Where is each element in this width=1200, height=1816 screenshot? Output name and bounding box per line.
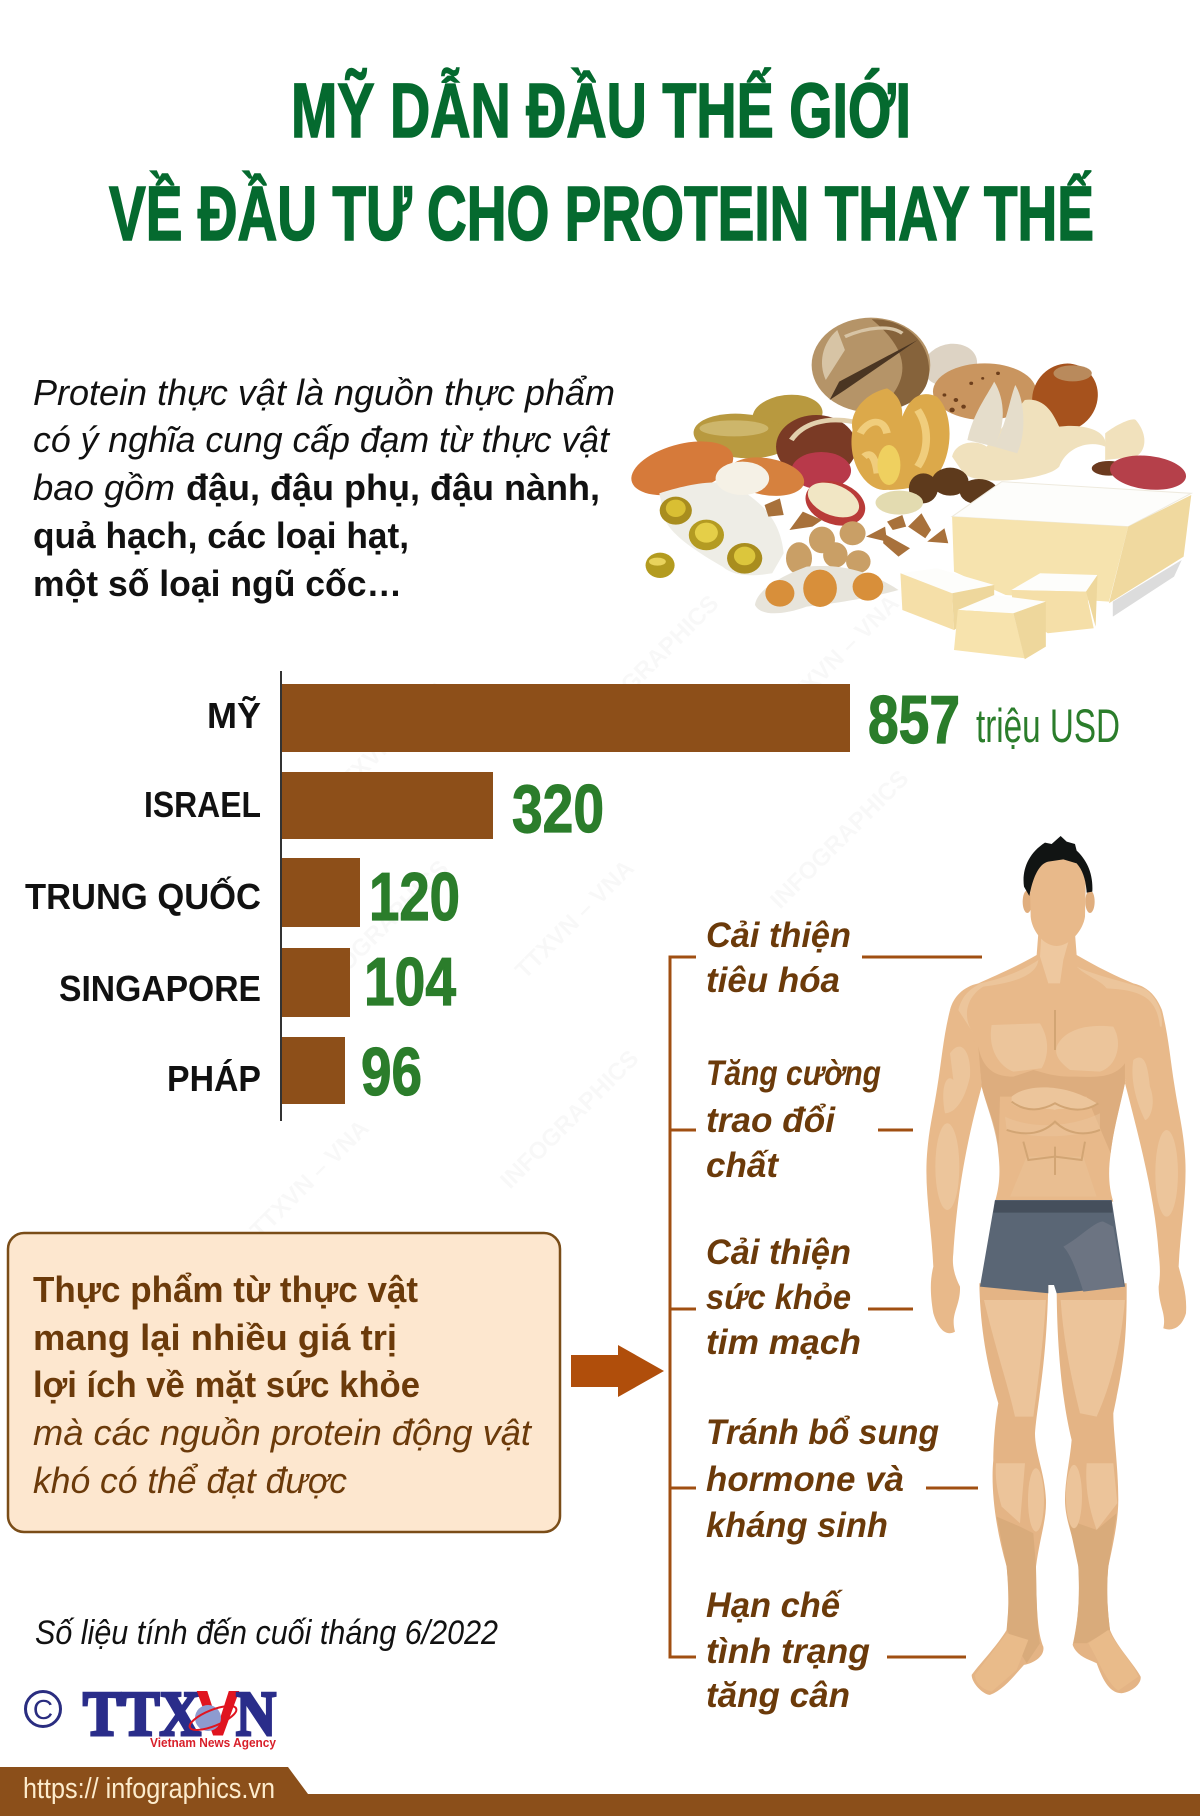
text: INFOGRAPHICS [765, 765, 914, 914]
bar: Israel: ISRAEL [144, 784, 261, 825]
callout: plant food benefits: Thực phẩm từ thực vật [33, 1269, 418, 1310]
benefit: heart health: sức khỏe [706, 1278, 851, 1317]
logo: TTXVN: V [197, 1679, 239, 1749]
copyright mark: C [33, 1694, 53, 1725]
icon: oval nut [876, 491, 923, 515]
bar: Singapore: SINGAPORE [59, 968, 261, 1009]
title: MỸ DẪN ĐẦU THẾ GIỚI [291, 67, 911, 154]
benefit: weight [706, 1586, 870, 1715]
benefit: digestion: tiêu hóa [706, 961, 840, 1000]
bar: Pháp [167, 1034, 422, 1110]
icon: cashew and seeds [952, 382, 1144, 481]
face [1030, 857, 1086, 946]
text: TTXVN – VNA [510, 855, 640, 984]
icon: small nut pieces [765, 498, 948, 557]
bar: Trung Quốc [25, 858, 460, 935]
icon: tan soybeans [786, 521, 871, 574]
shoulder highlights [935, 960, 1178, 1217]
pectoral highlights [991, 1023, 1118, 1197]
intro text: bao gồm [33, 467, 175, 508]
icon: brazil nut [776, 415, 856, 478]
leg highlights [975, 1300, 1138, 1692]
text: INFOGRAPHICS [575, 590, 724, 739]
callout: plant food benefits: khó có thể đạt được [33, 1460, 347, 1501]
intro text: có ý nghĩa cung cấp đạm từ thực vật [33, 419, 611, 460]
benefit: digestion [706, 916, 851, 1000]
neck [1040, 930, 1072, 983]
icon: right red peanut [1092, 452, 1189, 494]
title [109, 67, 1094, 257]
chart axis [280, 671, 282, 1121]
benefit: weight: tăng cân [706, 1676, 850, 1715]
logo: TTXVN [83, 1679, 277, 1750]
callout: plant food benefits [8, 1233, 560, 1532]
icon: tofu small blocks [900, 568, 1098, 659]
footer bar: https:// infographics.vn [23, 1773, 275, 1805]
benefit bracket and connectors [670, 957, 982, 1657]
abdominal lines [1007, 1010, 1100, 1175]
legs [972, 1283, 1141, 1695]
benefit: heart health: Cải thiện [706, 1233, 851, 1272]
icon: pistachio [915, 336, 985, 394]
benefit: hormones: hormone và [706, 1460, 904, 1499]
benefit: metabolism: Tăng cường [706, 1054, 881, 1093]
text: INFOGRAPHICS [495, 1045, 644, 1194]
icon: brown pieces [909, 468, 998, 504]
bar: Singapore: 104 [364, 944, 456, 1020]
text: TTXVN – VNA [325, 675, 455, 804]
icon: red peanut [791, 452, 851, 489]
bar: Mỹ: triệu USD [976, 699, 1120, 752]
icon: soybean pod orange [755, 566, 899, 613]
benefit: heart health: tim mạch [706, 1323, 861, 1362]
bar: Trung Quốc: TRUNG QUỐC [25, 875, 261, 917]
arrow [571, 1345, 664, 1397]
benefit: hormones: Tránh bổ sung [706, 1413, 939, 1452]
text: TTXVN – VNA [775, 590, 905, 719]
benefit labels [706, 916, 939, 1715]
intro text: một số loại ngũ cốc… [33, 563, 402, 604]
benefit: metabolism: chất [706, 1146, 779, 1185]
torso [950, 933, 1162, 1202]
benefit: heart health [706, 1233, 861, 1362]
illustration: nuts, soybeans and tofu [624, 318, 1191, 659]
icon: almonds [624, 431, 808, 505]
bar: Mỹ: 857 [868, 682, 960, 758]
benefit: hormones: kháng sinh [706, 1506, 888, 1545]
text: TTXVN – VNA [245, 1115, 375, 1244]
shorts [980, 1200, 1125, 1293]
benefit: metabolism [706, 1054, 881, 1185]
icon: golden nuts [691, 391, 826, 462]
callout: plant food benefits: mà các nguồn protein động vật [33, 1412, 533, 1453]
icon: pecan half [797, 472, 874, 534]
icon: speckled almond [933, 363, 1036, 420]
bar: Pháp: PHÁP [167, 1058, 261, 1099]
icon: whole walnut [812, 318, 930, 412]
bar: Israel: 320 [512, 771, 604, 847]
benefit: hormones [706, 1413, 939, 1545]
benefit: weight: tình trạng [706, 1632, 870, 1671]
bar chart: protein investment by country [25, 671, 1120, 1121]
bar: Trung Quốc: 120 [369, 859, 460, 935]
text: INFOGRAPHICS [305, 855, 454, 1004]
leg shading [997, 1513, 1117, 1663]
icon: hazelnut [1025, 358, 1105, 436]
intro text: Protein thực vật là nguồn thực phẩm [33, 372, 615, 413]
copyright mark [26, 1692, 60, 1726]
benefit: digestion: Cải thiện [706, 916, 851, 955]
icon: soybean pod yellow [659, 462, 784, 575]
bar: Israel [144, 771, 604, 847]
callout: plant food benefits: mang lại nhiều giá trị [33, 1317, 397, 1358]
intro text [33, 372, 615, 604]
bar: Mỹ [207, 682, 1120, 758]
icon: single soybean [646, 553, 675, 578]
bar: Singapore [59, 944, 456, 1020]
source note: Số liệu tính đến cuối tháng 6/2022 [35, 1614, 498, 1652]
ears [1023, 890, 1095, 913]
logo: TTXVN: TTX [83, 1679, 201, 1749]
illustration: human body [926, 836, 1186, 1695]
logo: TTXVN: Vietnam News Agency [150, 1735, 277, 1750]
bar: Pháp: 96 [361, 1034, 422, 1110]
bar: Mỹ: MỸ [207, 694, 261, 736]
hair [1024, 836, 1092, 896]
intro text: đậu, đậu phụ, đậu nành, [186, 467, 600, 508]
intro text: quả hạch, các loại hạt, [33, 515, 409, 556]
right arm [1125, 1010, 1186, 1329]
logo: TTXVN: N [236, 1679, 276, 1749]
footer bar [0, 1767, 1200, 1816]
callout: plant food benefits: lợi ích về mặt sức khỏe [33, 1364, 420, 1405]
icon: tofu large block [952, 482, 1191, 617]
icon: walnut half [851, 388, 950, 490]
left arm [926, 1010, 982, 1333]
benefit: metabolism: trao đổi [706, 1101, 836, 1140]
benefit: weight: Hạn chế [706, 1586, 843, 1625]
torso shading [978, 1047, 1125, 1153]
